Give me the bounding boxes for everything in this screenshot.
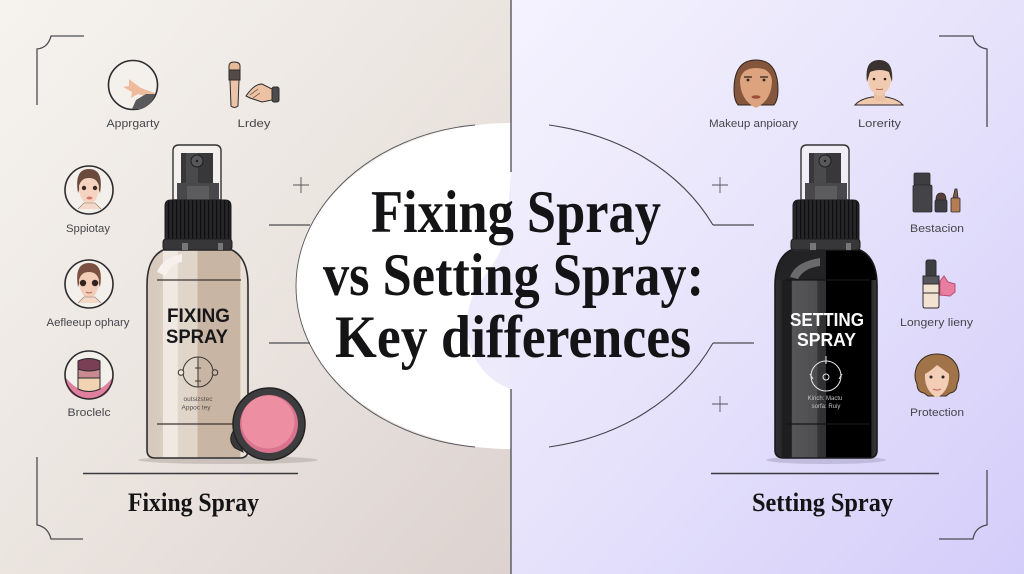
icon: woman with brown hair — [734, 60, 778, 108]
title: Key differences — [335, 304, 691, 370]
label: sppiotay: Sppiotay — [66, 223, 111, 235]
label: apprgarty: Apprgarty — [106, 118, 160, 130]
label: bestacion: Bestacion — [910, 223, 964, 235]
bottle fine print: Appoc tey — [182, 404, 211, 412]
label: broclelc: Broclelc — [68, 407, 111, 419]
connectors and plus marks — [269, 177, 754, 412]
bottle: fixing spray — [138, 145, 318, 464]
title — [323, 179, 704, 370]
title: Fixing Spray — [371, 179, 661, 245]
bottle label: fixing spray — [166, 306, 230, 348]
bottle: setting spray — [766, 145, 886, 464]
bottle fine print — [808, 396, 842, 410]
bottle fine print — [182, 396, 213, 412]
label: setting spray: Setting Spray — [752, 488, 893, 517]
icon: woman with wavy hair — [915, 354, 959, 398]
icon: face with sunglasses circle — [65, 260, 113, 308]
icon: person with short hair — [855, 60, 903, 105]
panel: setting spray background — [511, 0, 1024, 574]
icon: pink blush compact — [231, 388, 305, 460]
bottle label: setting spray — [790, 309, 864, 350]
bottle label: setting spray: SPRAY — [797, 329, 857, 350]
bottle fine print: sorfa: Ruiy — [812, 404, 840, 410]
label: longery lieny: Longery lieny — [900, 317, 974, 329]
central ellipse — [296, 123, 713, 449]
icon: foundation jar circle — [65, 351, 113, 399]
panel: fixing spray background — [0, 0, 511, 574]
label: protection: Protection — [910, 407, 964, 419]
baselines — [83, 472, 939, 474]
icon: head diagram — [810, 356, 842, 391]
icon: face diagram — [178, 357, 218, 387]
icon: cosmetic bottles — [913, 173, 960, 212]
label: lorerity: Lorerity — [858, 118, 902, 130]
bottle label: fixing spray: FIXING — [167, 306, 230, 327]
label: aefleeup ophary: Aefleeup ophary — [46, 317, 130, 329]
title: vs Setting Spray: — [323, 242, 704, 308]
bottle fine print: outsizstec — [184, 396, 213, 403]
label: makeup anpioary: Makeup anpioary — [709, 118, 799, 130]
label: lrdey: Lrdey — [238, 118, 271, 130]
icon: hand in circle — [108, 60, 158, 110]
bottle label: setting spray: SETTING — [790, 309, 864, 330]
icon: dropper bottle with hand — [923, 260, 955, 308]
centre divider — [510, 0, 512, 574]
bottle fine print: Kirich: Mactu — [808, 396, 842, 402]
bottle label: fixing spray: SPRAY — [166, 327, 228, 348]
icon: brush and hand — [229, 62, 279, 108]
label: fixing spray: Fixing Spray — [128, 488, 259, 517]
icon: woman face circle — [65, 166, 113, 214]
